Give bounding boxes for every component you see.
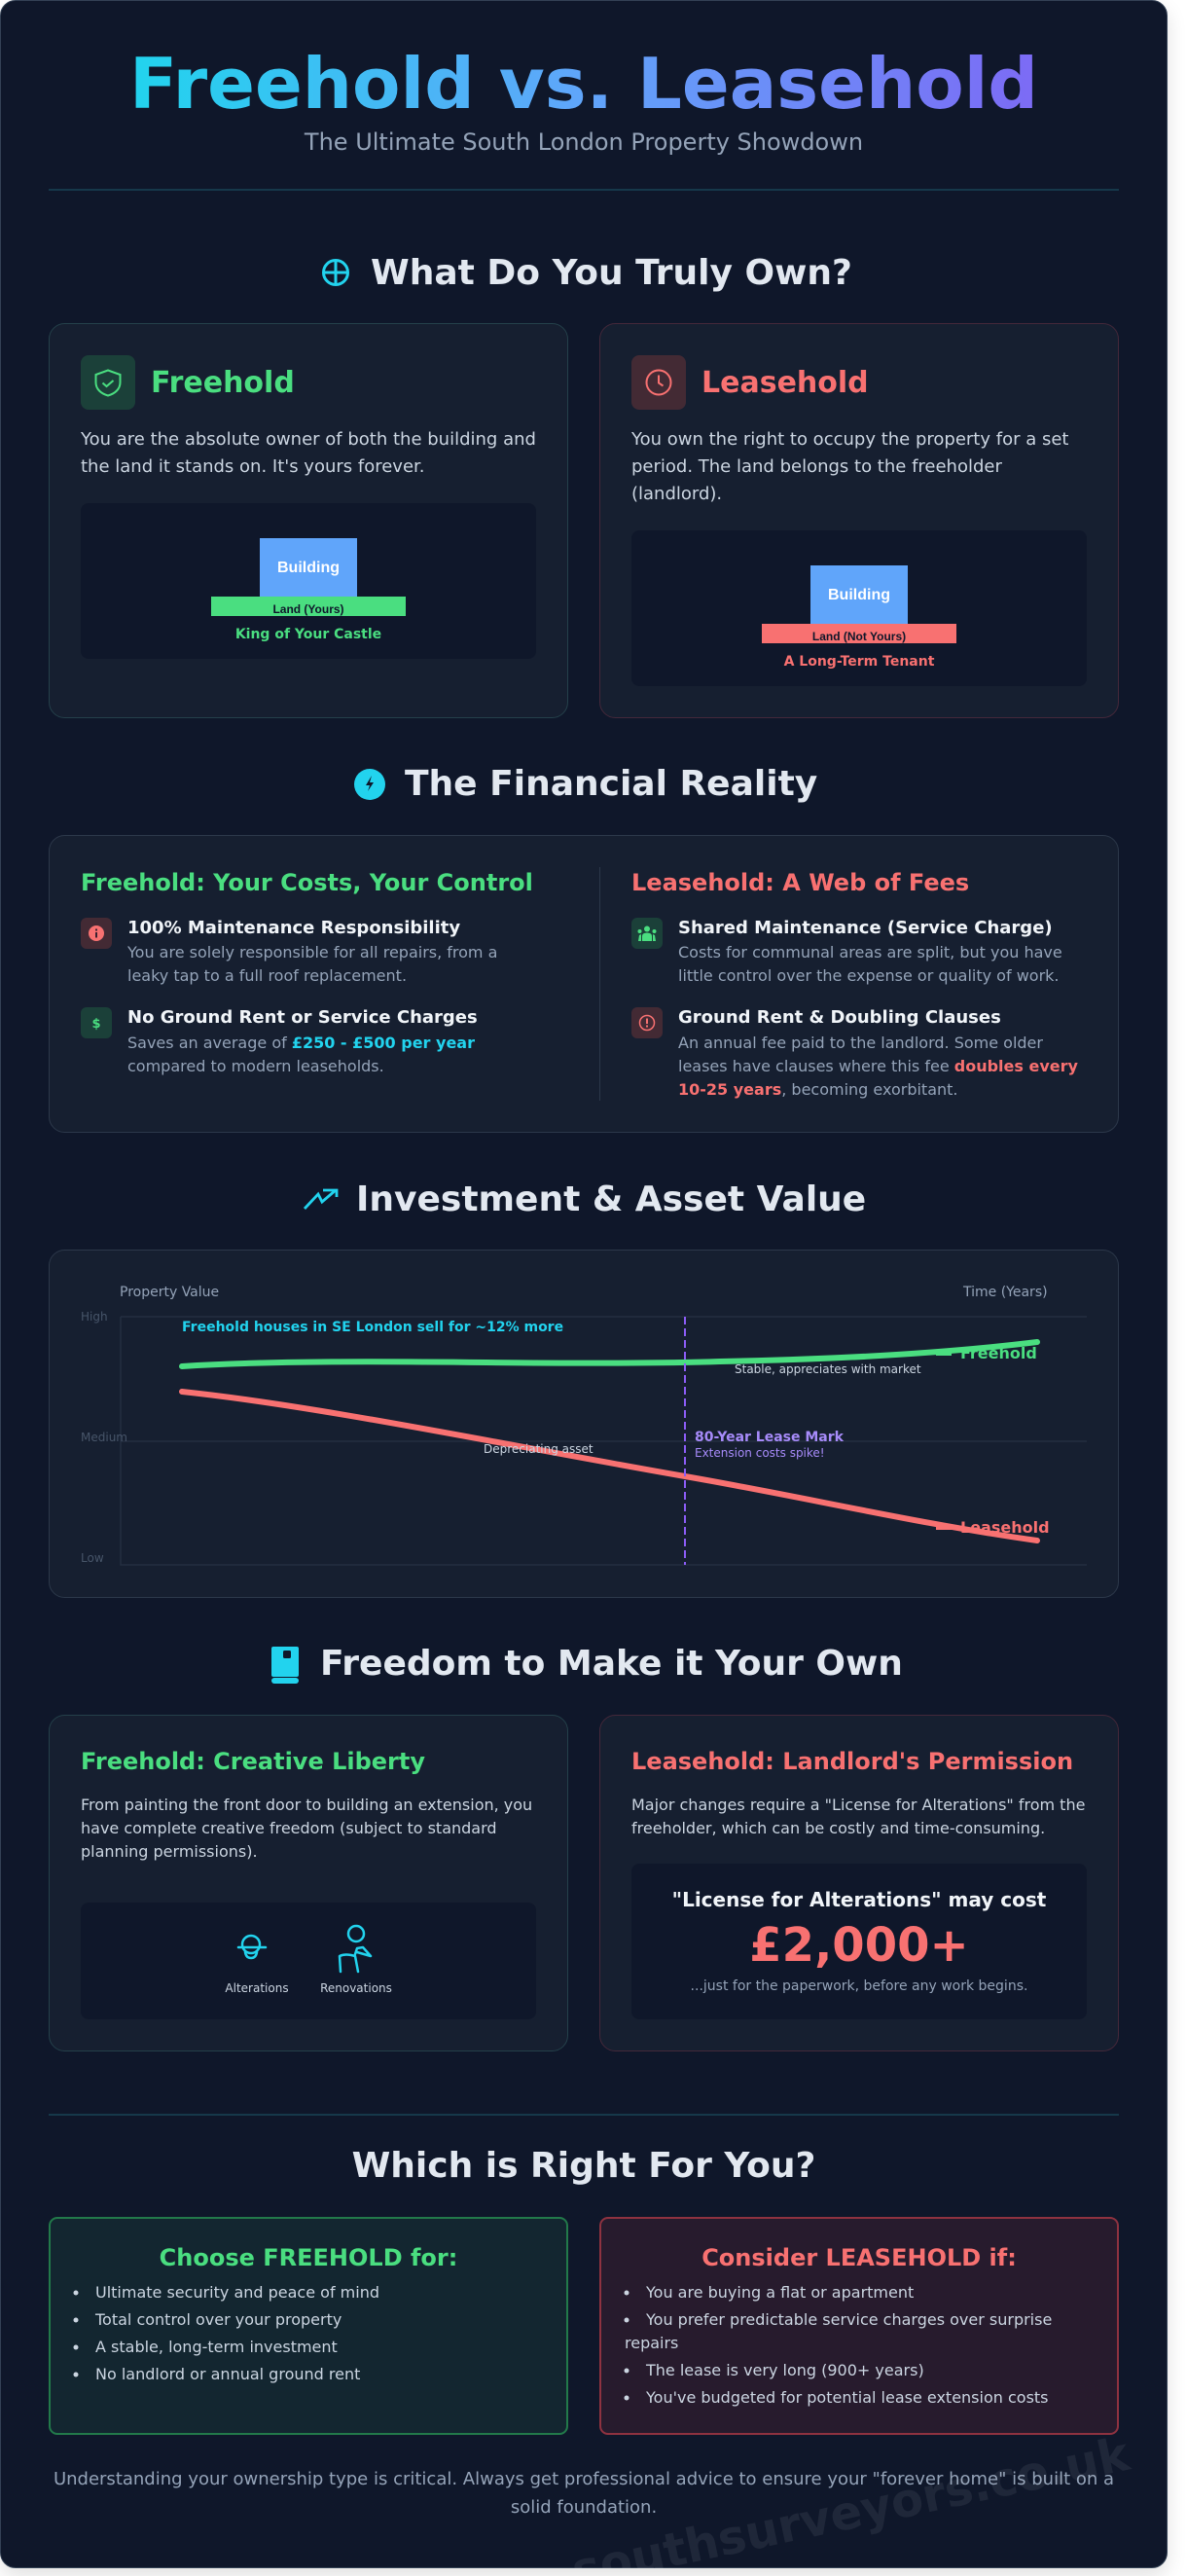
icon: globe cross <box>323 261 348 284</box>
panel: consider leasehold: Consider LEASEHOLD if: <box>701 2244 1017 2271</box>
footer note: solid foundation. <box>511 2497 657 2518</box>
description: period. The land belongs to the freeholder <box>631 456 1002 477</box>
diagram: land and building: Building <box>277 560 340 576</box>
icon: alterations <box>238 1936 266 1958</box>
icon: coin with bolt <box>354 769 385 800</box>
description: You own the right to occupy the property for a set <box>630 429 1068 450</box>
description: have complete creative freedom (subject to standard <box>81 1819 497 1837</box>
column: freehold costs: Freehold: Your Costs, Your Control <box>81 869 533 896</box>
section heading: Freedom to Make it Your Own: Freedom to Make it Your Own <box>320 1644 903 1684</box>
heading: Freehold: Creative Liberty <box>81 1748 425 1775</box>
item: ground rent: Ground Rent & Doubling Clauses <box>678 1007 1001 1028</box>
item: no ground rent <box>81 1007 478 1075</box>
icon: renovations <box>340 1926 371 1972</box>
panel: leasehold permission <box>599 1715 1119 2051</box>
checklist: Ultimate security and peace of mind <box>95 2283 379 2302</box>
annotation: 80-year lease mark: 80-Year Lease Mark <box>695 1430 845 1445</box>
item: no ground rent: Saves an average of £250 - £500 per year <box>127 1034 475 1052</box>
description: (landlord). <box>631 484 722 504</box>
heading: Freehold: Freehold <box>151 366 295 400</box>
line: leasehold value <box>182 1392 1037 1541</box>
item: ground rent: leases have clauses where this fee doubles every <box>678 1057 1078 1075</box>
column: leasehold fees <box>631 869 1078 1099</box>
diagram: alterations and renovations: Alterations <box>225 1981 289 1995</box>
description: planning permissions). <box>81 1842 258 1861</box>
description: From painting the front door to building an extension, you <box>81 1796 532 1814</box>
icon: door book <box>271 1647 299 1684</box>
panel: consider leasehold <box>600 2218 1118 2434</box>
section heading: Which is Right For You?: Which is Right For You? <box>352 2146 815 2186</box>
line label: freehold: Freehold <box>960 1344 1037 1362</box>
marker: 80-year lease line <box>684 1317 686 1565</box>
item: maintenance: You are solely responsible for all repairs, from a <box>126 943 497 961</box>
item: shared maintenance: Costs for communal areas are split, but you have <box>678 943 1062 961</box>
axis labels: Medium <box>81 1431 127 1444</box>
description: Major changes require a "License for Alterations" from the <box>631 1796 1085 1814</box>
item: shared maintenance <box>631 918 1062 985</box>
description <box>630 429 1068 504</box>
axis labels: Time (Years) <box>962 1285 1048 1300</box>
header <box>129 43 1038 156</box>
item: shared maintenance: Shared Maintenance (Service Charge) <box>678 918 1053 938</box>
description: the land it stands on. It's yours forever. <box>81 456 425 477</box>
annotation: 80-year lease mark <box>695 1430 845 1460</box>
panel: freehold ownership <box>49 323 568 718</box>
description <box>81 1796 532 1861</box>
line label: leasehold: Leasehold <box>960 1518 1050 1537</box>
panel: choose freehold <box>50 2218 567 2434</box>
checklist: The lease is very long (900+ years) <box>645 2361 924 2379</box>
column: freehold costs <box>81 869 533 1075</box>
heading: Leasehold: Leasehold <box>701 366 869 400</box>
item: no ground rent: No Ground Rent or Service Charges <box>127 1007 478 1028</box>
checklist <box>625 2283 1052 2407</box>
checklist: Total control over your property <box>94 2310 342 2329</box>
section heading: The Financial Reality: The Financial Reality <box>405 764 817 804</box>
diagram: land and building <box>81 503 536 659</box>
checklist: repairs <box>625 2334 678 2352</box>
section heading: What Do You Truly Own?: What Do You Truly Own? <box>371 253 852 293</box>
panel: investment chart <box>49 1250 1119 1598</box>
diagram: land and building: A Long-Term Tenant <box>784 654 935 670</box>
line: freehold value <box>182 1342 1037 1366</box>
callout: licence cost: ...just for the paperwork, before any work begins. <box>691 1978 1027 1994</box>
item: ground rent: An annual fee paid to the landlord. Some older <box>678 1034 1043 1052</box>
diagram: alterations and renovations <box>81 1903 536 2019</box>
checklist: You prefer predictable service charges over surprise <box>645 2310 1052 2329</box>
diagram: land and building: Building <box>828 587 890 603</box>
description: freeholder, which can be costly and time-consuming. <box>631 1819 1045 1837</box>
icon: clock <box>631 355 686 410</box>
heading: Leasehold: Landlord's Permission <box>631 1748 1073 1775</box>
axis labels <box>81 1285 1048 1565</box>
item: maintenance: 100% Maintenance Responsibility <box>127 918 460 938</box>
item: ground rent <box>631 1007 1078 1099</box>
icon: shield check <box>81 355 135 410</box>
panel: choose freehold: Choose FREEHOLD for: <box>160 2244 457 2271</box>
item: no ground rent: compared to modern leaseholds. <box>127 1057 384 1075</box>
checklist: No landlord or annual ground rent <box>95 2365 360 2383</box>
callout: licence cost <box>631 1864 1087 2019</box>
diagram: land and building: Land (Yours) <box>272 602 344 616</box>
description <box>631 1796 1085 1837</box>
description <box>80 429 536 477</box>
item: no ground rent: $ <box>91 1017 101 1032</box>
checklist: You are buying a flat or apartment <box>645 2283 914 2302</box>
checklist: You've budgeted for potential lease extension costs <box>645 2388 1049 2407</box>
item: shared maintenance: little control over the expense or quality of work. <box>678 966 1059 985</box>
section heading: Investment & Asset Value: Investment & Asset Value <box>356 1179 866 1219</box>
checklist <box>74 2283 379 2383</box>
annotation: depreciating: Depreciating asset <box>484 1442 594 1456</box>
icon: trend arrow <box>305 1190 337 1209</box>
callout: licence cost: "License for Alterations" may cost <box>672 1888 1047 1911</box>
diagram: alterations and renovations: Renovations <box>320 1981 392 1995</box>
diagram: land and building: King of Your Castle <box>235 627 381 642</box>
footer note: Understanding your ownership type is critical. Always get professional advice to ensure your "forever home" is built on a <box>54 2469 1114 2489</box>
subtitle: The Ultimate South London Property Showdown <box>304 128 863 156</box>
callout: licence cost: £2,000+ <box>749 1918 969 1973</box>
description: You are the absolute owner of both the building and <box>80 429 536 450</box>
checklist: A stable, long-term investment <box>95 2338 338 2356</box>
callout: 12% premium: Freehold houses in SE London sell for ~12% more <box>182 1320 563 1335</box>
axis labels: High <box>81 1310 108 1324</box>
item: maintenance <box>81 918 497 985</box>
title: Freehold vs. Leasehold <box>129 43 1038 125</box>
panel: leasehold ownership <box>599 323 1119 718</box>
annotation: 80-year lease mark: Extension costs spike! <box>695 1446 825 1460</box>
axis labels: Low <box>81 1551 104 1565</box>
axis labels: Property Value <box>120 1285 219 1300</box>
panel: financial reality <box>49 835 1119 1133</box>
footer note <box>54 2469 1114 2518</box>
column: leasehold fees: Leasehold: A Web of Fees <box>631 869 969 896</box>
diagram: land and building <box>631 530 1087 686</box>
item: maintenance: leaky tap to a full roof replacement. <box>127 966 407 985</box>
item: ground rent: 10-25 years, becoming exorbitant. <box>678 1080 957 1099</box>
annotation: stable: Stable, appreciates with market <box>735 1362 921 1376</box>
panel: freehold creative liberty <box>49 1715 568 2051</box>
diagram: land and building: Land (Not Yours) <box>812 630 906 643</box>
